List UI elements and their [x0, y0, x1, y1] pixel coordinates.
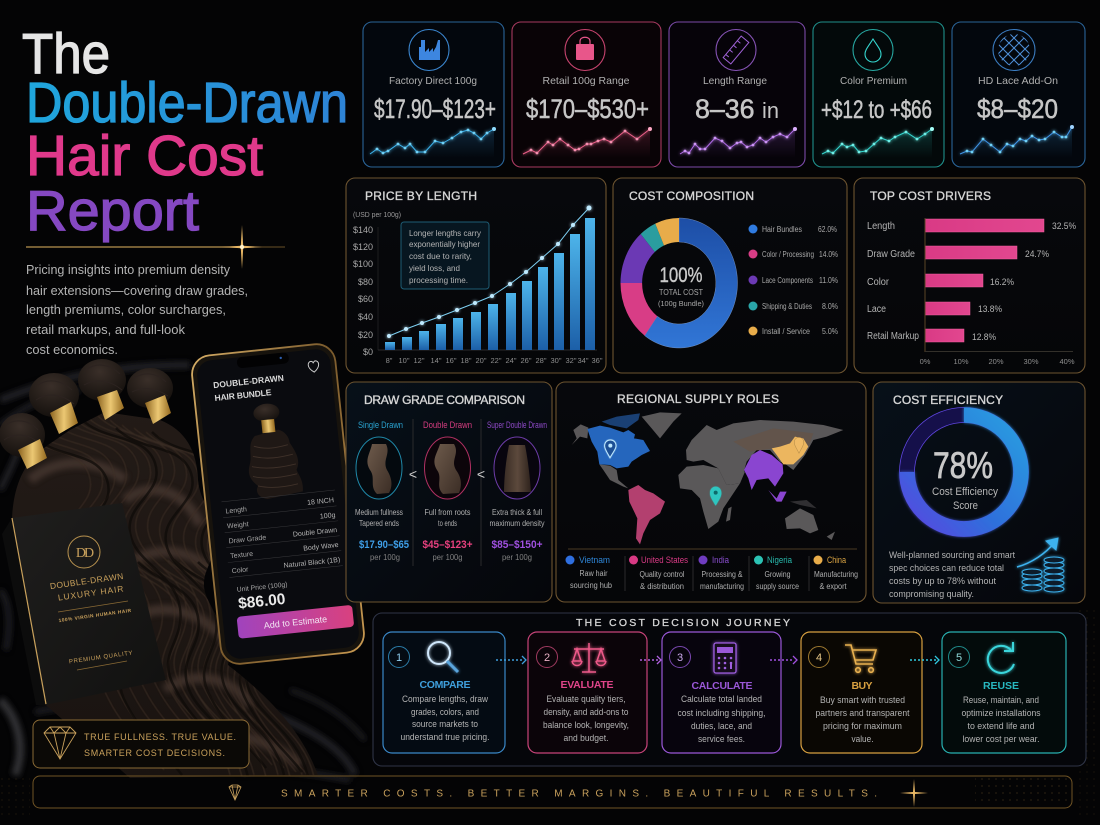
panel: price by length	[346, 178, 606, 373]
region: Nigeria: Growing	[764, 570, 790, 579]
step 2: evaluate	[528, 632, 647, 753]
region: India	[698, 555, 744, 591]
score: Score	[953, 500, 978, 512]
intro paragraph: length premiums, color surcharges,	[26, 303, 226, 317]
intro paragraph	[26, 263, 248, 357]
column: single drawn	[355, 420, 409, 562]
region: China	[814, 555, 858, 591]
region: Vietnam: sourcing hub	[570, 581, 613, 590]
product box: PREMIUM QUALITY	[69, 651, 133, 665]
bar values: 24.7%	[1025, 249, 1049, 260]
step 4: buy: 4	[816, 652, 822, 664]
KPI card: HD lace	[952, 22, 1085, 167]
legend: 14.0%	[819, 250, 838, 259]
axis labels: 20%	[988, 357, 1004, 366]
panel: cost decision journey: THE COST DECISION JOURNEY	[576, 617, 790, 629]
y axis labels: $100	[353, 259, 373, 269]
step 2: evaluate: EVALUATE	[560, 679, 614, 691]
star	[900, 779, 928, 807]
x axis labels	[386, 356, 603, 365]
sparkline	[822, 127, 934, 158]
icon: small diamond	[229, 785, 241, 800]
spec table: Natural Black (1B)	[283, 557, 341, 570]
x axis labels: 14"	[430, 356, 442, 365]
axis labels: 40%	[1059, 357, 1075, 366]
column: single drawn: Tapered ends	[359, 519, 399, 528]
panel: cost composition	[613, 178, 847, 373]
bar labels	[867, 221, 919, 342]
region: India: India	[712, 555, 729, 565]
panel: regional supply roles: REGIONAL SUPPLY ROLES	[617, 392, 779, 406]
panel: cost efficiency: COST EFFICIENCY	[893, 393, 1003, 407]
step 5: reuse: to extend life and	[968, 721, 1034, 732]
step 4: buy	[801, 632, 922, 753]
bar labels: Length	[867, 221, 895, 232]
bar labels: Draw Grade	[867, 249, 915, 260]
spec table: Weight	[227, 521, 249, 530]
x axis labels: 28"	[535, 356, 547, 365]
icon: shopping bag	[565, 30, 605, 70]
box logo: DD	[76, 546, 94, 561]
step 5: reuse: REUSE	[983, 680, 1019, 692]
pin: teal	[710, 487, 721, 506]
KPI card: color premium	[813, 22, 944, 167]
title: Double-Drawn	[26, 71, 348, 135]
arrow	[496, 656, 526, 664]
intro paragraph: cost economics.	[26, 343, 118, 357]
panel: price by length: PRICE BY LENGTH	[365, 189, 477, 203]
column: super double drawn: maximum density	[490, 519, 544, 528]
spec table: Double Drawn	[293, 527, 338, 539]
step 1: compare	[383, 632, 505, 753]
legend: 8.0%	[822, 302, 838, 311]
legend: Color / Processing	[762, 250, 814, 259]
bundle tops	[0, 359, 173, 469]
step 1: compare: 1	[396, 652, 402, 664]
product box: 100% VIRGIN HUMAN HAIR	[58, 608, 132, 624]
legend: 62.0%	[818, 225, 837, 234]
panel: cost decision journey	[373, 613, 1086, 766]
icon: diamond	[44, 727, 76, 759]
map region: South America	[628, 485, 665, 544]
icon: heart	[308, 361, 319, 373]
y axis labels	[353, 225, 373, 357]
icon: water drop	[853, 30, 893, 70]
step 3: calculate: cost including shipping,	[678, 708, 766, 719]
arrow	[770, 656, 797, 664]
step 3: calculate	[662, 632, 781, 753]
step 4: buy: partners and transparent	[816, 708, 910, 719]
sparkline	[960, 125, 1074, 158]
region: China: China	[827, 555, 846, 565]
arrow	[910, 656, 939, 664]
spec table: Texture	[230, 551, 254, 560]
step 5: reuse: Reuse, maintain, and	[963, 695, 1039, 706]
bar values: 32.5%	[1052, 221, 1076, 232]
spec table: Color	[231, 566, 249, 575]
column: single drawn: Single Drawn	[358, 420, 403, 430]
gold dot texture	[0, 610, 1100, 818]
step 4: buy: Buy smart with trusted	[820, 695, 905, 706]
step 2: evaluate: 2	[544, 652, 550, 664]
ring gauge	[900, 408, 1028, 536]
column: super double drawn	[487, 420, 547, 562]
region: Nigeria: Nigeria	[767, 555, 792, 565]
y axis labels: $20	[358, 330, 373, 340]
panel: draw grade comparison: DRAW GRADE COMPARISON	[364, 393, 525, 407]
intro paragraph: retail markups, and full-look	[26, 323, 186, 337]
axis labels: 10%	[953, 357, 969, 366]
product box: LUXURY HAIR	[57, 583, 124, 603]
bar values: 16.2%	[990, 277, 1014, 288]
region: Nigeria	[754, 555, 799, 591]
phone hair bundle	[242, 401, 304, 501]
region: Vietnam	[566, 555, 613, 590]
footer banner: SMARTER COSTS. BETTER MARGINS. BEAUTIFUL RESULTS.	[281, 788, 877, 800]
x axis labels: 36"	[591, 356, 603, 365]
column: double drawn	[422, 420, 472, 562]
legend: Install / Service	[762, 327, 810, 336]
region: China: & export	[820, 582, 847, 591]
gold divider with star	[26, 225, 285, 269]
x axis labels: 32"	[565, 356, 577, 365]
donut centre: 100%	[660, 264, 702, 287]
region: United States: & distribution	[640, 582, 684, 591]
step 4: buy: value.	[852, 734, 874, 745]
step 5: reuse: optimize installations	[962, 708, 1041, 719]
y axis labels: $120	[353, 242, 373, 252]
step 1: compare: source markets to	[412, 719, 478, 730]
step 2: evaluate: balance look, longevity,	[543, 720, 629, 731]
donut centre	[658, 264, 704, 308]
title: Report	[26, 179, 199, 243]
bar values	[972, 221, 1076, 343]
bar values: 12.8%	[972, 332, 996, 343]
donut centre: (100g Bundle)	[658, 299, 704, 308]
icon: magnifier	[428, 642, 458, 672]
panel: cost efficiency	[873, 382, 1085, 603]
KPI card: retail range: $170–$530+	[526, 94, 649, 124]
satin backdrop	[0, 365, 365, 780]
spec table: 18 INCH	[307, 497, 334, 507]
spec table: Body Wave	[303, 542, 339, 553]
callout	[401, 222, 489, 289]
map region: North America	[587, 426, 650, 468]
y axis labels: $0	[363, 347, 373, 357]
donut chart	[620, 218, 737, 348]
comparison marks	[409, 466, 485, 482]
unit price: $86.00	[237, 591, 286, 613]
callout: yield loss, and	[409, 263, 460, 273]
KPI card: length range: Length Range	[703, 75, 767, 87]
horizontal bar chart	[925, 219, 1044, 342]
column: double drawn: $45–$123+	[422, 539, 472, 551]
y axis labels: $80	[358, 277, 373, 287]
KPI card: HD lace: $8–$20	[977, 94, 1058, 124]
region: India: Processing &	[702, 570, 743, 579]
pin: gold	[794, 437, 804, 453]
hair bundles	[0, 359, 340, 785]
region: Vietnam: Vietnam	[579, 555, 610, 565]
x axis labels: 24"	[505, 356, 517, 365]
unit price: Unit Price (100g)	[236, 581, 288, 594]
title: The	[22, 22, 110, 86]
region: Vietnam: Raw hair	[580, 569, 608, 578]
column: double drawn: per 100g	[432, 553, 462, 562]
map region: India and Southeast Asia	[744, 450, 787, 502]
x axis labels: 18"	[460, 356, 472, 365]
add to estimate button: Add to Estimate	[263, 614, 328, 631]
step 3: calculate: 3	[677, 652, 683, 664]
step 4: buy: pricing for maximum	[823, 721, 902, 732]
description: spec choices can reduce total	[889, 563, 1004, 574]
panel: top cost drivers: TOP COST DRIVERS	[870, 189, 991, 203]
column: super double drawn: Extra thick & full	[492, 508, 542, 517]
intro paragraph: hair extensions—covering draw grades,	[26, 284, 248, 298]
step 5: reuse: lower cost per wear.	[962, 734, 1040, 745]
y axis labels: $60	[358, 294, 373, 304]
panel: regional supply roles	[556, 382, 866, 602]
step 2: evaluate: Evaluate quality tiers,	[546, 694, 626, 705]
region: United States	[629, 555, 688, 591]
spec table: Draw Grade	[228, 534, 267, 545]
column: single drawn: $17.90–$65	[359, 539, 409, 551]
spec table: 100g	[320, 512, 336, 521]
pin: blue	[605, 440, 616, 458]
callout: processing time.	[409, 275, 468, 285]
bar labels: Retail Markup	[867, 331, 919, 342]
region: United States: Quality control	[640, 570, 685, 579]
step 3: calculate: duties, lace, and	[691, 721, 752, 732]
donut centre: TOTAL COST	[659, 288, 703, 297]
KPI card: retail range: Retail 100g Range	[542, 75, 630, 87]
phone mockup	[190, 342, 366, 666]
description: compromising quality.	[889, 589, 974, 600]
panel: top cost drivers	[854, 178, 1085, 373]
spec table: Length	[225, 506, 247, 516]
KPI card: factory direct	[363, 22, 504, 167]
x axis labels: 30"	[550, 356, 562, 365]
x axis labels: 22"	[490, 356, 502, 365]
arrow	[640, 656, 661, 664]
sparkline	[523, 127, 652, 158]
column: double drawn: Full from roots	[424, 508, 470, 517]
sparkline	[680, 127, 797, 158]
description: Well-planned sourcing and smart	[889, 550, 1015, 561]
x axis labels: 20"	[475, 356, 487, 365]
step 1: compare: COMPARE	[420, 679, 470, 691]
KPI card: length range	[669, 22, 805, 167]
column: super double drawn: $85–$150+	[492, 539, 542, 551]
panel: price by length: (USD per 100g)	[353, 210, 401, 219]
icon: calculator	[714, 643, 736, 673]
step 5: reuse	[942, 632, 1066, 753]
icon: lace mesh	[992, 29, 1036, 71]
icon: coins and arrow	[1017, 538, 1064, 592]
unit price	[236, 581, 290, 613]
description: costs by up to 78% without	[889, 576, 996, 587]
intro paragraph: Pricing insights into premium density	[26, 263, 231, 277]
column: double drawn: to ends	[438, 519, 457, 528]
step 3: calculate: Calculate total landed	[681, 694, 762, 705]
column: single drawn: per 100g	[370, 553, 400, 562]
step 4: buy: BUY	[852, 680, 872, 692]
icon: ruler	[716, 30, 756, 70]
phone heading: HAIR BUNDLE	[214, 387, 272, 403]
x axis labels: 8"	[386, 356, 393, 365]
map region: China	[772, 437, 808, 464]
column: double drawn: Double Drawn	[423, 420, 472, 430]
title	[22, 22, 348, 243]
phone heading: DOUBLE-DRAWN	[213, 373, 284, 390]
box logo	[68, 536, 100, 568]
score	[932, 445, 998, 512]
comparison marks: <	[477, 466, 485, 482]
axis labels: 30%	[1023, 357, 1039, 366]
spec table	[221, 490, 343, 577]
step 2: evaluate: density, and add-ons to	[544, 707, 628, 718]
bar values: 13.8%	[978, 304, 1002, 315]
title: Hair Cost	[26, 124, 263, 188]
step 1: compare: understand true pricing.	[400, 732, 490, 743]
comparison marks: <	[409, 466, 417, 482]
hair mass	[12, 414, 316, 778]
bar chart	[385, 218, 595, 350]
column: super double drawn: Super Double Drawn	[487, 420, 547, 430]
product box: DOUBLE-DRAWN	[49, 571, 124, 591]
panel: draw grade comparison	[346, 382, 552, 602]
panel: cost composition: COST COMPOSITION	[629, 189, 754, 203]
KPI card: color premium: +$12 to +$66	[821, 96, 932, 124]
KPI card: length range: 8–36 in	[695, 94, 779, 124]
x axis labels: 16"	[445, 356, 457, 365]
legend: 11.0%	[819, 276, 838, 285]
tagline badge: SMARTER COST DECISIONS.	[84, 748, 225, 758]
product box	[2, 503, 166, 705]
callout: Longer lengths carry	[409, 228, 482, 238]
footer banner	[33, 776, 1072, 808]
tagline badge: TRUE FULLNESS. TRUE VALUE.	[84, 732, 236, 742]
x axis labels: 10"	[398, 356, 410, 365]
tagline badge	[33, 720, 249, 768]
score: 78%	[933, 445, 993, 486]
score: Cost Efficiency	[932, 486, 998, 498]
callout: exponentially higher	[409, 239, 480, 249]
KPI card: retail range	[512, 22, 661, 167]
region: China: Manufacturing	[814, 570, 858, 579]
step 2: evaluate: and budget.	[564, 733, 608, 744]
legend: Hair Bundles	[762, 225, 802, 234]
column: single drawn: Medium fullness	[355, 508, 403, 517]
KPI card: HD lace: HD Lace Add-On	[978, 75, 1058, 87]
bar labels: Color	[867, 277, 890, 288]
axis labels	[920, 357, 1075, 366]
legend: Shipping & Duties	[762, 302, 812, 311]
KPI card: factory direct: $17.90–$123+	[374, 94, 496, 124]
step 3: calculate: service fees.	[698, 734, 745, 745]
column: super double drawn: per 100g	[502, 553, 532, 562]
legend	[748, 224, 838, 336]
x axis labels: 26"	[520, 356, 532, 365]
region: Nigeria: supply source	[756, 582, 799, 591]
y axis labels: $40	[358, 312, 373, 322]
legend: 5.0%	[822, 327, 838, 336]
step 1: compare: grades, colors, and	[411, 707, 479, 718]
KPI card: color premium: Color Premium	[840, 75, 907, 87]
trend line	[387, 206, 592, 338]
y axis labels: $140	[353, 225, 373, 235]
icon: factory	[409, 30, 449, 70]
x axis labels: 34"	[577, 356, 589, 365]
world map	[572, 412, 843, 544]
region: India: manufacturing	[700, 582, 744, 591]
region: United States: United States	[641, 555, 688, 565]
sparkline	[370, 127, 496, 158]
icon: cart	[845, 645, 876, 672]
phone heading	[213, 373, 286, 403]
KPI card: factory direct: Factory Direct 100g	[389, 75, 477, 87]
description	[889, 550, 1015, 600]
bar labels: Lace	[867, 304, 886, 315]
step 5: reuse: 5	[956, 652, 962, 664]
axis labels: 0%	[920, 357, 931, 366]
legend: Lace Components	[762, 276, 813, 285]
add to estimate button	[237, 605, 354, 639]
callout: cost due to rarity,	[409, 251, 472, 261]
icon: reuse arrow	[988, 642, 1014, 673]
x axis labels: 12"	[413, 356, 425, 365]
step 1: compare: Compare lengths, draw	[402, 694, 488, 705]
icon: scales	[572, 643, 606, 672]
step 3: calculate: CALCULATE	[692, 680, 752, 692]
